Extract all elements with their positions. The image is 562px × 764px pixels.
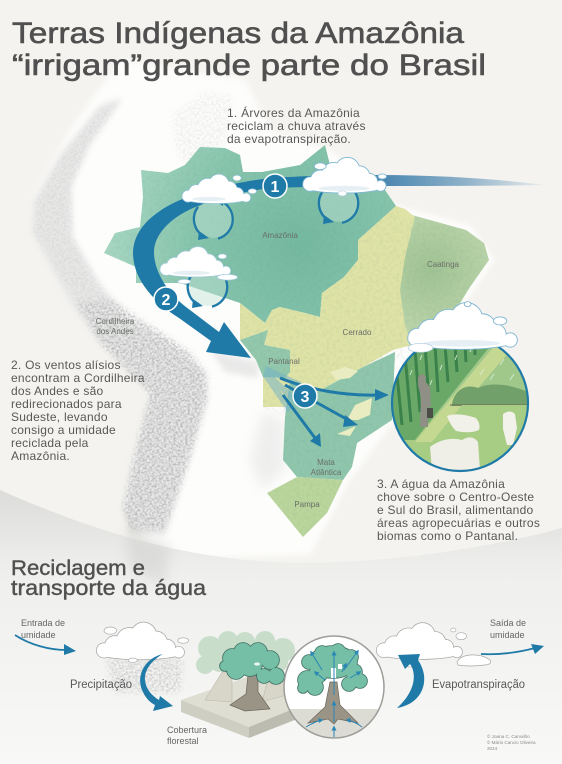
map fade into lower panel	[125, 530, 170, 585]
circular scene: farm in the rain	[390, 347, 530, 472]
map labels: Cerrado	[343, 328, 372, 337]
text block 2: encontram a Cordilheira	[11, 371, 145, 385]
credits	[487, 733, 536, 751]
map labels: Pampa	[294, 500, 320, 509]
texture on biomes	[117, 212, 478, 530]
cloud: right	[377, 623, 467, 667]
section heading: Reciclagem e	[11, 557, 145, 580]
biome: Cerrado	[240, 206, 415, 407]
moisture output label and arrow	[481, 618, 544, 654]
text block 1: 1. Árvores da Amazônia	[227, 105, 360, 120]
badge 2	[154, 287, 178, 311]
map labels: Mata	[317, 458, 335, 467]
biome: Mata Atlântica	[283, 352, 395, 480]
text block 2: redirecionados para	[11, 397, 122, 411]
upper field	[390, 335, 530, 410]
forest slab	[181, 677, 315, 738]
zoom tree	[308, 682, 358, 724]
crop field	[393, 348, 488, 440]
meadow	[434, 405, 527, 440]
evapotranspiration arrow	[397, 654, 424, 708]
rain under left cloud	[106, 658, 183, 693]
text block 2	[11, 358, 145, 463]
map labels: Atlântica	[311, 468, 342, 477]
biome: Pantanal	[240, 330, 290, 378]
map base: South America terrain	[32, 60, 495, 560]
biome: Pampa	[267, 477, 343, 537]
text block 3: biomas como o Pantanal.	[377, 529, 518, 543]
credits: © Joana C. Carvalho	[487, 733, 530, 739]
badge 3: 3	[301, 389, 310, 406]
cloud C	[160, 247, 237, 284]
biome: Caatinga	[398, 215, 489, 340]
forest cover label: Cobertura	[167, 725, 207, 735]
foreground tree	[220, 643, 284, 711]
text block 1: reciclam a chuva através	[227, 119, 366, 133]
arrows 3: rain flowing south	[265, 369, 389, 447]
moisture output label and arrow: Saída de	[490, 618, 526, 628]
forest cover label: florestal	[167, 736, 199, 746]
map labels: Cordilheira	[96, 317, 135, 326]
cloud B	[303, 158, 386, 196]
arrow 1-2: Amazon moisture flow	[133, 175, 545, 358]
evapotranspiration label: Evapotranspiração	[432, 679, 525, 691]
text block 2: consigo a umidade	[11, 423, 116, 437]
text block 3	[377, 477, 540, 543]
recycling ring C	[188, 264, 227, 308]
text block 3: 3. A água da Amazônia	[377, 477, 505, 491]
title: “irrigam”grande parte do Brasil	[12, 49, 486, 82]
title: Terras Indígenas da Amazônia	[12, 17, 464, 50]
precipitation arrow	[140, 654, 173, 711]
precipitation label: Precipitação	[70, 679, 132, 691]
background trees	[196, 631, 295, 702]
credits: © Mário Cancio Oliveira	[487, 739, 536, 745]
text block 2: Amazônia.	[11, 449, 70, 463]
text block 2: reciclada pela	[11, 436, 89, 450]
zoom circle: tree water flow	[283, 635, 385, 739]
text block 2: dos Andes e são	[11, 384, 104, 398]
text block 2: 2. Os ventos alísios	[11, 358, 121, 372]
badge 3	[293, 384, 317, 408]
badge 2: 2	[162, 292, 171, 309]
blue water arrows	[306, 651, 362, 737]
lower panel background	[0, 490, 562, 764]
recycling ring B	[319, 180, 358, 224]
cloud A	[182, 174, 257, 203]
text block 1	[227, 105, 366, 146]
title	[12, 17, 486, 82]
map labels	[96, 231, 460, 509]
sheep	[447, 414, 480, 432]
badge 1: 1	[271, 179, 280, 196]
forest cover label	[167, 725, 207, 746]
section heading: transporte da água	[11, 577, 206, 600]
moisture input label and arrow	[15, 618, 76, 655]
farmer	[418, 374, 431, 427]
map labels: Amazônia	[262, 231, 298, 240]
moisture output label and arrow: umidade	[490, 630, 525, 640]
small cloud: right	[457, 655, 491, 666]
text block 3: áreas agropecuárias e outros	[377, 516, 540, 530]
moisture input label and arrow: umidade	[21, 630, 56, 640]
map labels: dos Andes	[96, 327, 134, 336]
biome map of Brazil	[100, 140, 500, 540]
section heading	[11, 557, 206, 600]
biome: Amazônia	[104, 145, 396, 323]
cloud: left	[97, 622, 189, 663]
text block 3: e Sul do Brasil, alimentando	[377, 503, 533, 517]
text block 2: Sudeste, levando	[11, 410, 108, 424]
orchard	[452, 385, 528, 406]
text block 1: da evapotranspiração.	[227, 132, 351, 146]
recycling ring A	[194, 196, 233, 240]
map labels: Pantanal	[268, 357, 300, 366]
badge 1	[263, 174, 287, 198]
map labels: Caatinga	[427, 260, 460, 269]
moisture input label and arrow: Entrada de	[21, 618, 65, 628]
cloud above scene	[408, 302, 517, 352]
credits: 2024	[487, 746, 498, 751]
text block 3: chove sobre o Centro-Oeste	[377, 490, 534, 504]
